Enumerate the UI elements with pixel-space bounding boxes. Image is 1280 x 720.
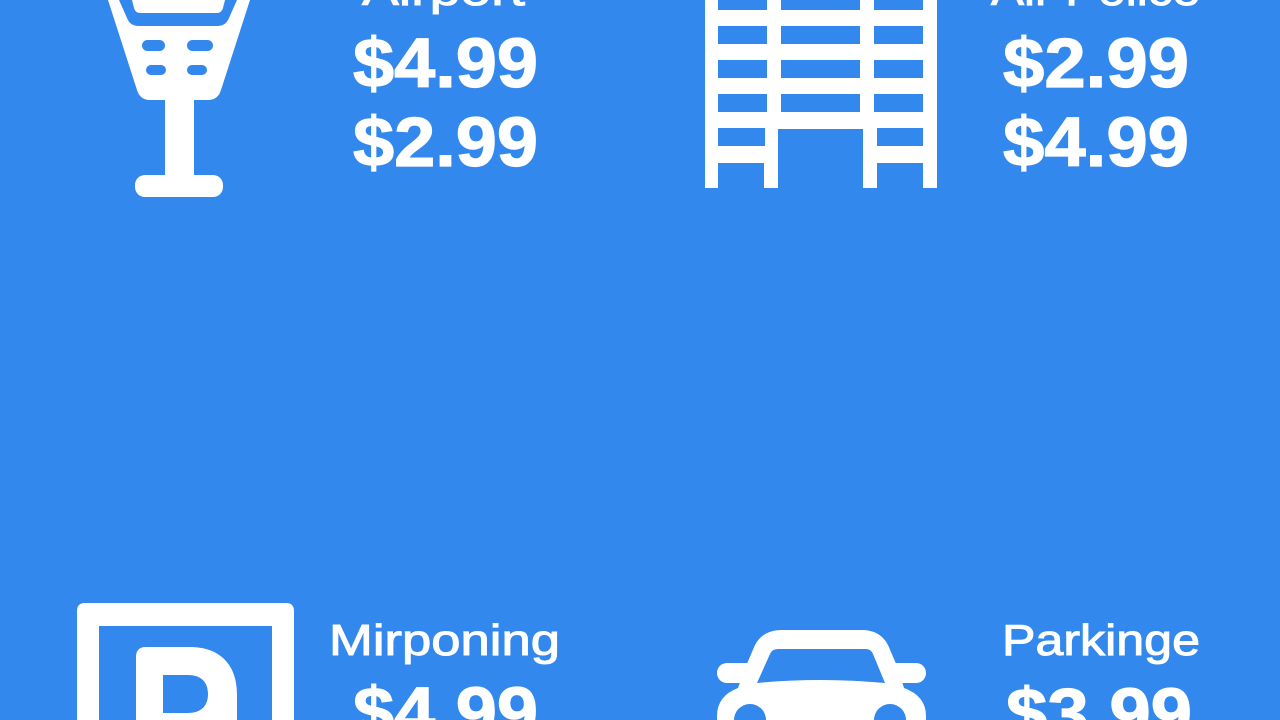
panel: air police parking garage [705,0,1200,188]
icon: car [717,630,926,720]
icon: parking garage building [705,0,937,188]
icon: parking meter [108,0,250,197]
panel: airport parking meter [108,0,538,197]
label: parkinge: Parkinge [1002,616,1200,665]
panel: parking sign [77,603,560,720]
price: 2.99: $2.99 [1003,24,1189,102]
price: 4.99: $4.99 [1003,103,1189,181]
price: 2.99: $2.99 [353,103,538,181]
price: 4.99: $4.99 [353,24,538,102]
panel: parking car [717,616,1200,720]
label: mirponing: Mirponing [329,616,560,665]
icon: parking sign [77,603,294,720]
